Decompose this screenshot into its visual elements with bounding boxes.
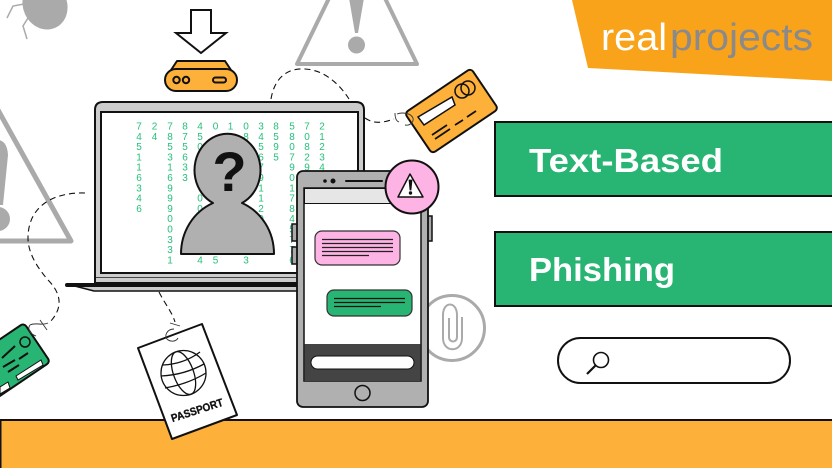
binary code digits: 7 [289,152,295,163]
binary code digits: 3 [167,245,173,256]
phone side buttons [292,216,432,264]
binary code digits: 5 [213,255,219,266]
phone [292,171,432,407]
binary code digits: 3 [258,122,264,132]
binary code digits: 8 [182,122,188,132]
binary code digits: 6 [182,152,188,163]
binary code digits: 7 [136,122,142,132]
phone body [297,171,428,407]
icon: bug [7,0,76,39]
binary code digits: 2 [258,204,264,215]
binary code digits: 8 [289,132,295,143]
binary code digits: 9 [167,194,173,205]
phone camera and speaker [323,178,383,184]
binary code digits: 1 [319,132,325,143]
binary code digits: 6 [289,255,295,266]
binary code digits: 5 [258,142,264,153]
icon: orange credit card [405,68,498,154]
binary code digits: 8 [304,142,310,153]
binary code digits: 4 [289,214,295,225]
pink message bubble [315,231,400,265]
phone header bar [304,188,420,204]
binary code digits: 3 [243,255,249,266]
binary code digits: 6 [136,173,142,184]
hook on orange card [395,113,413,125]
passport hook [166,323,180,341]
binary code digits: 1 [258,194,264,205]
logo banner [572,0,832,81]
binary code digits: 2 [304,152,310,163]
binary code digits: 8 [273,122,279,132]
binary code digits: 7 [289,245,295,256]
binary code digits: 3 [319,152,325,163]
binary code digits: 5 [289,224,295,236]
phone home button [355,386,370,400]
binary code digits: 4 [258,132,264,143]
title box: Phishing: Phishing [529,251,675,288]
hook on green card [29,320,48,336]
phone screen [304,188,421,381]
binary code digits: 8 [167,132,173,143]
binary code digits: 0 [197,204,203,215]
icon: pink alert badge [386,160,438,214]
binary code digits: 7 [289,235,295,246]
binary code digits: 5 [273,152,279,163]
binary code digits: 2 [319,142,325,153]
laptop screen [101,112,358,273]
binary code digits: 6 [258,152,264,163]
orange floor bar [0,420,832,468]
binary code digits [136,122,325,266]
title box: Text-Based: Text-Based [529,142,723,179]
binary code digits: 0 [289,173,295,184]
binary code digits: 7 [304,122,310,132]
binary code digits: 0 [197,194,203,205]
binary code digits: 7 [258,163,264,174]
binary code digits: 7 [289,194,295,205]
binary code digits: 1 [289,183,295,194]
search bar [558,338,790,383]
icon: passport [138,323,237,439]
binary code digits: 4 [136,194,142,205]
logo banner: real [601,17,667,59]
title box: Phishing [495,232,832,306]
binary code digits: 5 [182,142,188,153]
binary code digits: 7 [182,132,188,143]
laptop lid [95,102,364,283]
binary code digits: 0 [167,214,173,225]
binary code digits: 8 [243,132,249,143]
binary code digits: 3 [167,152,173,163]
icon: download arrow [176,10,226,53]
binary code digits: 6 [167,173,173,184]
binary code digits: 4 [197,122,203,132]
icon: passport: PASSPORT [170,397,225,425]
binary code digits: 9 [273,142,279,153]
binary code digits: 5 [197,132,203,143]
binary code digits: 4 [319,163,325,174]
binary code digits: 9 [167,204,173,215]
binary code digits: 3 [136,183,142,194]
binary code digits: 2 [152,122,158,132]
binary code digits: 3 [182,173,188,184]
laptop base [67,284,330,291]
icon: anonymous person: ? [212,140,247,203]
binary code digits: 1 [136,163,142,174]
binary code digits: 9 [258,173,264,184]
laptop hinge [65,283,330,287]
icon: magnifier [587,352,608,374]
binary code digits: 5 [289,122,295,132]
laptop lid lower line [96,276,330,278]
logo banner: projects [670,17,813,59]
icon: paperclip badge [420,296,484,360]
laptop [65,102,364,291]
binary code digits: 9 [304,163,310,174]
binary code digits: 0 [289,142,295,153]
binary code digits: 1 [136,152,142,163]
binary code digits: 3 [182,163,188,174]
icon: green ID card [0,323,50,407]
binary code digits: 8 [289,204,295,215]
icon: anonymous person [181,134,274,254]
binary code digits: 9 [289,163,295,174]
binary code digits: 4 [152,132,158,143]
binary code digits: 1 [167,255,173,266]
binary code digits: 5 [273,132,279,143]
dashed connectors [28,69,394,322]
binary code digits: 0 [243,122,249,132]
binary code digits: 1 [258,183,264,194]
binary code digits: 6 [136,204,142,215]
phone input bar [304,344,420,381]
binary code digits: 0 [213,122,219,132]
icon: orange server [165,61,237,91]
binary code digits: 9 [167,183,173,194]
binary code digits: 0 [197,142,203,153]
binary code digits: 0 [167,224,173,236]
binary code digits: 3 [167,235,173,246]
binary code digits: 4 [136,132,142,143]
binary code digits: 1 [167,163,173,174]
icon: top warning triangle [297,0,417,64]
binary code digits: 0 [304,132,310,143]
binary code digits: 1 [228,122,234,132]
binary code digits: 4 [197,255,203,266]
binary code digits: 0 [258,214,264,225]
binary code digits: 2 [319,122,325,132]
phone text field [311,356,414,369]
title box: Text-Based [495,122,832,196]
binary code digits: 5 [167,142,173,153]
binary code digits: 5 [136,142,142,153]
binary code digits: 7 [167,122,173,132]
green message bubble [327,290,412,316]
icon: left warning triangle [0,110,71,241]
